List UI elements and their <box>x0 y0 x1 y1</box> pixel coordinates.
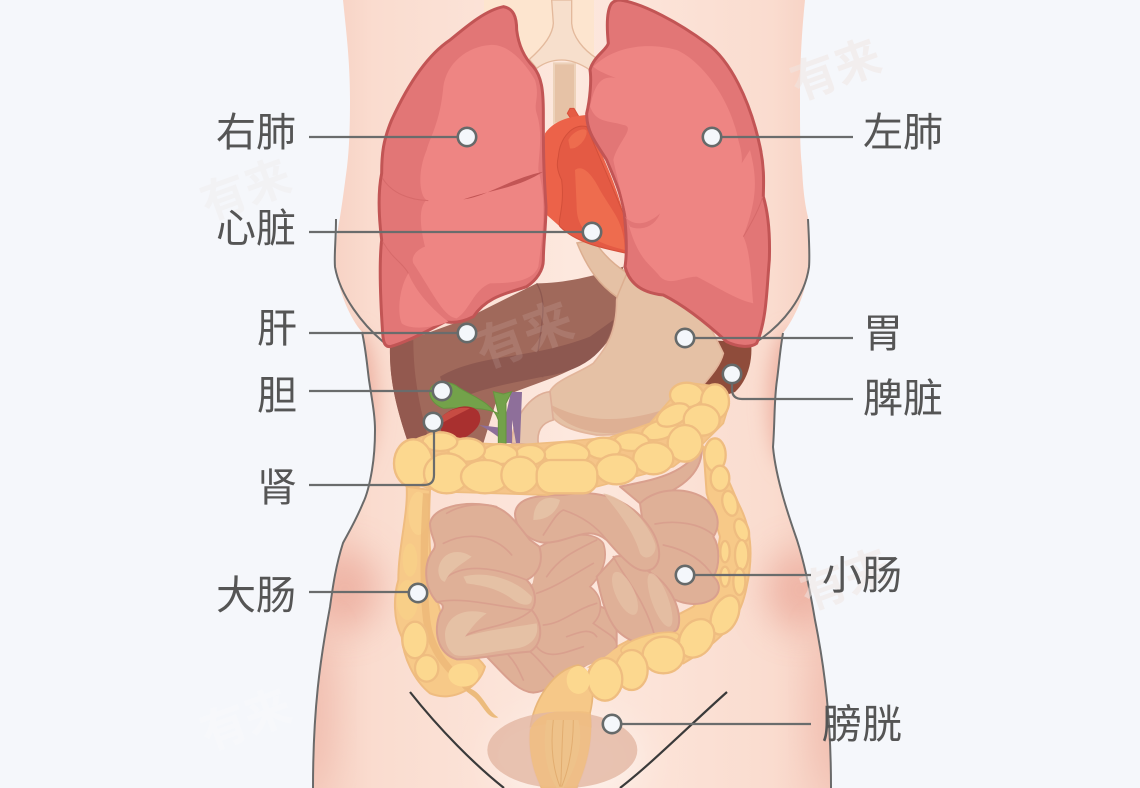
label: 肾: 肾 <box>257 466 297 510</box>
label: 脾脏 <box>723 365 943 421</box>
label: 胃: 胃 <box>863 312 903 356</box>
stomach <box>547 270 723 435</box>
label: 脾脏: 脾脏 <box>863 377 943 421</box>
label: 大肠: 大肠 <box>216 574 296 618</box>
small intestine <box>426 447 719 693</box>
label: 膀胱: 膀胱 <box>822 703 902 747</box>
label: 肝 <box>257 307 476 351</box>
label: 小肠: 小肠 <box>822 554 902 598</box>
watermarks: 有来 <box>784 30 888 110</box>
label: 胃 <box>676 312 903 356</box>
label: 右肺: 右肺 <box>216 111 296 155</box>
colon: transverse and descending sacculations <box>394 383 752 788</box>
label: 右肺 <box>216 111 476 155</box>
esophagus lower section <box>577 240 627 297</box>
body outlines <box>313 219 831 788</box>
label: 大肠 <box>216 574 427 618</box>
spleen <box>700 340 751 402</box>
label: 胆 <box>257 374 451 418</box>
label: 膀胱 <box>603 703 902 747</box>
label: 小肠 <box>676 554 902 598</box>
liver <box>390 267 623 443</box>
label: 心脏: 心脏 <box>216 207 296 251</box>
purple vessel <box>479 392 522 443</box>
colon: ascending and descending backing <box>395 447 751 718</box>
label: 肝: 肝 <box>257 307 297 351</box>
kidney <box>438 406 480 438</box>
left lung <box>587 0 770 346</box>
torso <box>292 0 853 788</box>
gallbladder and bile duct <box>430 382 512 443</box>
label: 左肺: 左肺 <box>863 111 943 155</box>
watermarks <box>194 30 898 760</box>
watermarks: 有来 <box>194 680 298 760</box>
label: 胆: 胆 <box>257 374 297 418</box>
large intestine <box>394 383 752 788</box>
label: 左肺 <box>703 111 943 155</box>
heart <box>542 108 627 253</box>
windpipe and esophagus <box>529 0 597 123</box>
watermarks: 有来 <box>194 150 298 230</box>
duodenum <box>512 392 553 445</box>
pelvic crease lines <box>410 692 727 788</box>
label: 肾 <box>257 413 442 510</box>
watermarks: 有来 <box>468 292 581 379</box>
label: 心脏 <box>216 207 601 251</box>
watermarks: 有来 <box>794 540 898 620</box>
right lung <box>379 7 546 347</box>
bladder <box>487 711 637 788</box>
